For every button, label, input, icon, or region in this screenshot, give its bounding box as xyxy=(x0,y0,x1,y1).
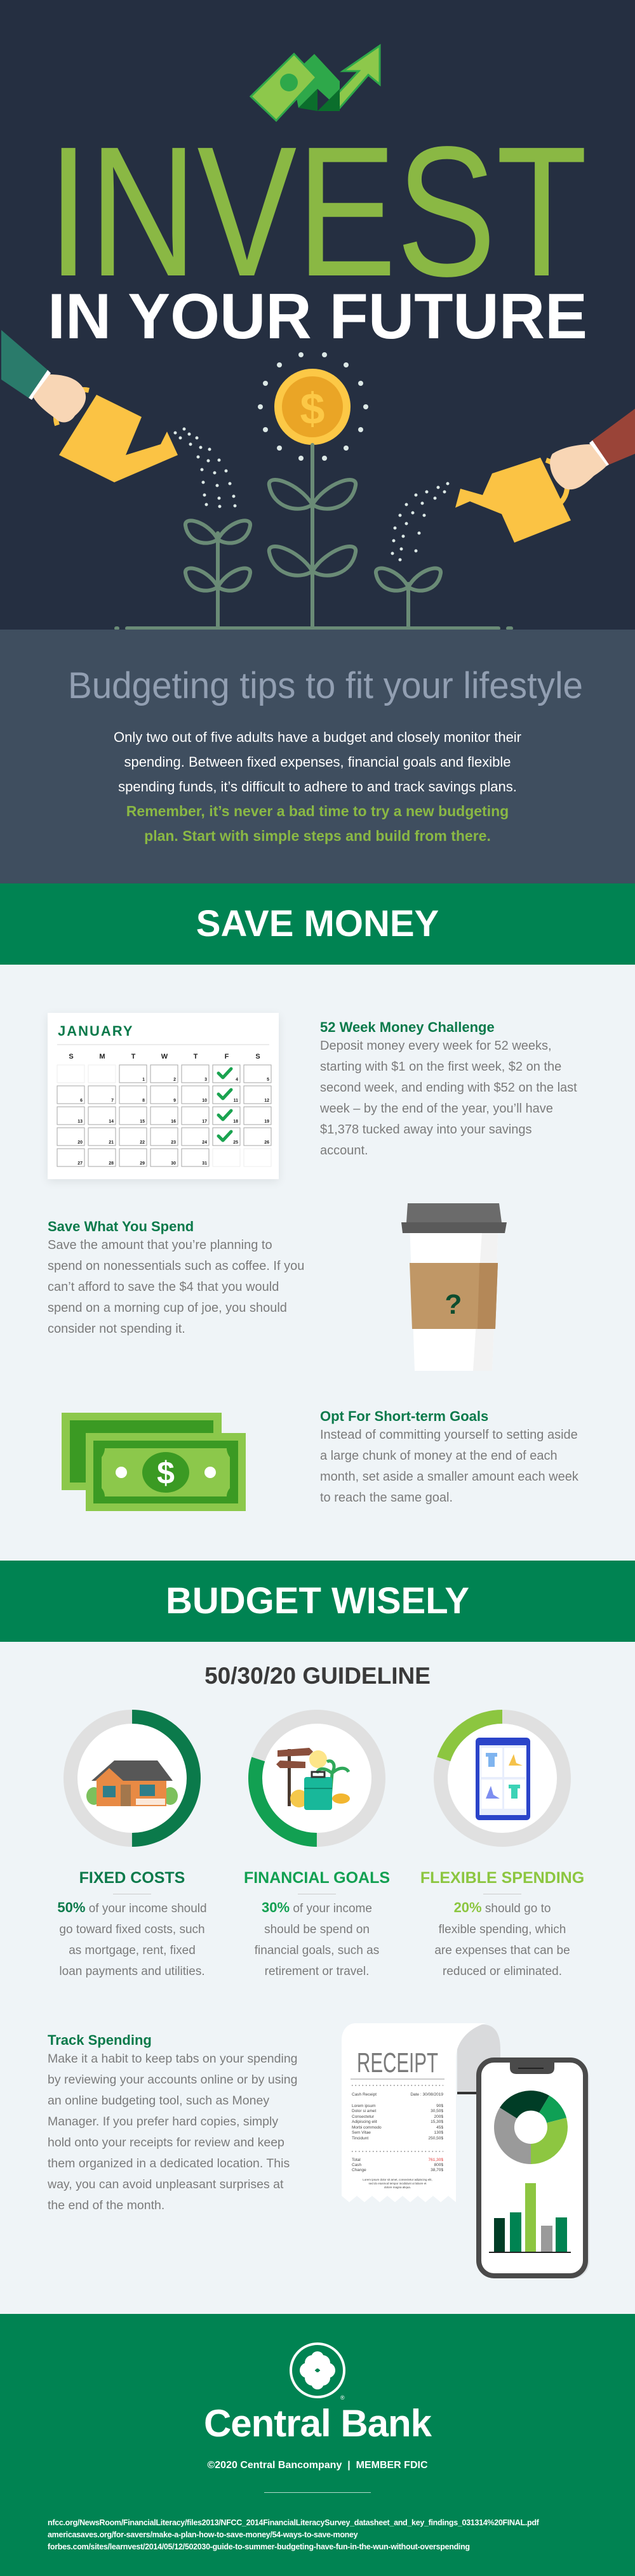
calendar: 11 xyxy=(234,1099,238,1103)
logo: clover in circle: ® xyxy=(340,2394,345,2401)
banner: BUDGET WISELY xyxy=(0,1561,635,1642)
intro paragraph: spending funds, it’s difficult to adhere to and track savings plans. xyxy=(118,779,517,795)
icon: travel suitcase xyxy=(276,1748,350,1810)
donut: flexible spending 20% xyxy=(434,1710,571,1847)
text: track spending xyxy=(48,2032,298,2212)
banner: SAVE MONEY xyxy=(0,883,635,965)
icon: receipt: Cash xyxy=(352,2163,362,2167)
icon: phone with charts xyxy=(476,2057,589,2278)
calendar: 29 xyxy=(140,1161,145,1166)
icon: receipt: Lorem ipsum xyxy=(352,2104,376,2108)
text: track spending: Track Spending xyxy=(48,2032,152,2048)
text: save what you spend: Save the amount that you’re planning to xyxy=(48,1238,272,1252)
calendar: F xyxy=(225,1053,229,1060)
calendar: S xyxy=(69,1053,74,1060)
text: 52 week money challenge: starting with $1 on the first week, $2 on the xyxy=(320,1060,561,1074)
icon: coffee cup xyxy=(401,1203,507,1371)
banner: BUDGET WISELY: BUDGET WISELY xyxy=(166,1580,469,1622)
icon: receipt: 15,30$ xyxy=(431,2120,443,2124)
label: fixed costs xyxy=(57,1869,207,1978)
calendar: 28 xyxy=(109,1161,114,1166)
heading: budgeting tips: Budgeting tips to fit your lifestyle xyxy=(68,665,583,706)
banner: SAVE MONEY: SAVE MONEY xyxy=(196,903,439,944)
icon: coin with sparkle dots xyxy=(258,352,368,461)
label: financial goals xyxy=(244,1869,390,1978)
intro paragraph: Remember, it’s never a bad time to try a new budgeting xyxy=(126,803,509,819)
footer xyxy=(0,2314,635,2576)
text: track spending: an online budgeting tool, such as Money xyxy=(48,2094,269,2108)
hero xyxy=(0,0,635,630)
icon: receipt: 800$ xyxy=(434,2163,443,2167)
calendar: 16 xyxy=(171,1120,176,1124)
text: track spending: way, you can avoid unpleasant surprises at xyxy=(48,2177,283,2191)
intro paragraph: spending. Between fixed expenses, financial goals and flexible xyxy=(124,754,511,770)
brand name: Central Bank xyxy=(204,2402,431,2445)
calendar: 10 xyxy=(202,1099,207,1103)
icon: receipt: 130$ xyxy=(434,2130,443,2135)
text: 52 week money challenge: 52 Week Money Challenge xyxy=(320,1019,495,1035)
text: save what you spend: Save What You Spend xyxy=(48,1219,194,1234)
calendar: 2 xyxy=(173,1078,176,1082)
calendar: 20 xyxy=(77,1140,83,1145)
text: save what you spend: spend on nonessentials such as coffee. If you xyxy=(48,1259,304,1273)
icon: coin with sparkle dots: $ xyxy=(300,384,324,433)
intro paragraph: plan. Start with simple steps and build from there. xyxy=(144,828,491,844)
text: track spending: them organized in a dedicated location. This xyxy=(48,2157,290,2170)
label: flexible spending: reduced or eliminated. xyxy=(443,1965,562,1978)
label: flexible spending: FLEXIBLE SPENDING xyxy=(420,1869,584,1887)
label: fixed costs: as mortgage, rent, fixed xyxy=(69,1944,196,1957)
label: flexible spending xyxy=(420,1869,584,1978)
icon: receipt: 761,30$ xyxy=(428,2158,443,2162)
calendar: M xyxy=(99,1053,105,1060)
text: track spending: Make it a habit to keep tabs on your spending xyxy=(48,2052,298,2066)
icon: money with arrow xyxy=(251,46,380,121)
calendar: 15 xyxy=(140,1120,145,1124)
icon: left hand with watering can xyxy=(1,330,178,482)
calendar: 19 xyxy=(264,1120,269,1124)
plants xyxy=(116,445,511,628)
label: financial goals: 30% of your income xyxy=(262,1899,372,1915)
calendar: 7 xyxy=(111,1099,114,1103)
calendar: JANUARY xyxy=(58,1023,134,1039)
calendar: T xyxy=(194,1053,198,1060)
icon: receipt: Dolor si amet xyxy=(352,2109,376,2113)
text: opt for short-term goals: Opt For Short-term Goals xyxy=(320,1408,488,1424)
calendar: 24 xyxy=(202,1140,207,1145)
donut: fixed costs 50% xyxy=(64,1710,201,1847)
intro paragraph: Only two out of five adults have a budget and closely monitor their xyxy=(114,729,521,745)
icon: receipt: Total xyxy=(352,2158,361,2162)
icon: receipt: Tincidunt xyxy=(352,2136,368,2141)
text: save what you spend: can’t afford to save the $4 that you would xyxy=(48,1280,279,1294)
calendar: 4 xyxy=(236,1078,238,1082)
icon: receipt xyxy=(342,2023,500,2202)
donut: financial goals 30% xyxy=(248,1710,385,1847)
calendar: 18 xyxy=(233,1120,238,1124)
subtitle: IN YOUR FUTURE: IN YOUR FUTURE xyxy=(48,281,587,352)
calendar: 30 xyxy=(171,1161,176,1166)
icon: receipt: Consectetur xyxy=(352,2115,375,2119)
icon: dollar bills: $ xyxy=(157,1455,175,1491)
icon: receipt: Adipiscing elit xyxy=(352,2120,377,2124)
icon: receipt: Morbi commodo xyxy=(352,2125,382,2130)
icon: shopping phone xyxy=(476,1738,530,1820)
calendar: S xyxy=(255,1053,260,1060)
water drops xyxy=(174,428,450,561)
sources xyxy=(48,2518,539,2551)
label: flexible spending: flexible spending, which xyxy=(439,1923,566,1936)
calendar xyxy=(48,1013,279,1179)
icon: receipt: 250,50$ xyxy=(428,2136,443,2141)
sources: forbes.com/sites/learnvest/2014/05/12/502030-guide-to-summer-budgeting-have-fun-in-the-wun-without-overspending xyxy=(48,2542,470,2551)
sources: nfcc.org/NewsRoom/FinancialLiteracy/files2013/NFCC_2014FinancialLiteracySurvey_datasheet_and_key_findings_031314%20FINAL.pdf xyxy=(48,2518,539,2527)
calendar: 3 xyxy=(204,1078,207,1082)
calendar: W xyxy=(161,1053,168,1060)
text: 52 week money challenge: account. xyxy=(320,1144,368,1158)
label: fixed costs: FIXED COSTS xyxy=(79,1869,185,1887)
intro panel xyxy=(0,630,635,883)
calendar: 31 xyxy=(202,1161,207,1166)
calendar: T xyxy=(131,1053,136,1060)
text: track spending: the end of the month. xyxy=(48,2198,164,2212)
logo: clover in circle xyxy=(290,2342,345,2401)
text: 52 week money challenge: second week, and ending with $52 on the last xyxy=(320,1081,577,1095)
icon: house xyxy=(86,1760,178,1806)
chart: bars xyxy=(489,2183,571,2252)
icon: coffee cup: ? xyxy=(445,1289,462,1320)
text: opt for short-term goals xyxy=(320,1408,578,1505)
calendar: 26 xyxy=(264,1140,269,1145)
copyright line: ©2020 Central Bancompany | MEMBER FDIC xyxy=(207,2460,428,2471)
label: financial goals: should be spend on xyxy=(264,1923,370,1936)
text: save what you spend: consider not spending it. xyxy=(48,1322,185,1336)
text: 52 week money challenge: $1,378 tucked away into your savings xyxy=(320,1123,532,1137)
label: flexible spending: 20% should go to xyxy=(454,1899,551,1915)
label: fixed costs: 50% of your income should xyxy=(57,1899,207,1915)
text: opt for short-term goals: a large chunk of money at the end of each xyxy=(320,1449,558,1463)
label: financial goals: retirement or travel. xyxy=(265,1965,369,1978)
calendar: 6 xyxy=(80,1099,83,1103)
icon: receipt: dolore magna aliqua. xyxy=(384,2186,411,2189)
label: flexible spending: are expenses that can be xyxy=(434,1944,570,1957)
calendar: 22 xyxy=(140,1140,145,1145)
icon: receipt: Sem Vitae xyxy=(352,2130,371,2135)
text: opt for short-term goals: to reach the same goal. xyxy=(320,1491,453,1505)
calendar: 25 xyxy=(233,1140,238,1145)
text: 52 week money challenge: Deposit money every week for 52 weeks, xyxy=(320,1039,552,1053)
icon: receipt: 90$ xyxy=(436,2104,443,2108)
calendar: 8 xyxy=(142,1099,145,1103)
icon: right hand with watering can xyxy=(455,409,635,543)
label: financial goals: financial goals, such as xyxy=(255,1944,379,1957)
calendar: 12 xyxy=(264,1099,269,1103)
icon: receipt: 200$ xyxy=(434,2115,443,2119)
calendar: 27 xyxy=(77,1161,83,1166)
text: opt for short-term goals: month, set aside a smaller amount each week xyxy=(320,1470,578,1484)
label: fixed costs: loan payments and utilities. xyxy=(59,1965,205,1978)
calendar: 23 xyxy=(171,1140,176,1145)
text: track spending: by reviewing your accounts online or by using xyxy=(48,2073,297,2087)
calendar: 1 xyxy=(142,1078,145,1082)
label: financial goals: FINANCIAL GOALS xyxy=(244,1869,390,1887)
icon: receipt: Date : 30/08/2019 xyxy=(410,2092,443,2097)
icon: receipt: 45$ xyxy=(436,2125,443,2130)
icon: dollar bills xyxy=(62,1413,246,1511)
chart: donut xyxy=(494,2091,568,2164)
calendar: 17 xyxy=(202,1120,207,1124)
heading: 50/30/20 guideline: 50/30/20 GUIDELINE xyxy=(204,1663,431,1689)
text: track spending: hold onto your receipts for review and keep xyxy=(48,2136,284,2150)
icon: receipt: 30,50$ xyxy=(431,2109,443,2113)
calendar: 21 xyxy=(109,1140,114,1145)
icon: receipt: Lorem ipsum dolor sit amet, consectetur adipiscing elit, xyxy=(363,2178,432,2181)
icon: receipt: RECEIPT xyxy=(357,2047,438,2078)
text: save what you spend: spend on a morning cup of joe, you should xyxy=(48,1301,287,1315)
calendar: 14 xyxy=(109,1120,114,1124)
sources: americasaves.org/for-savers/make-a-plan-how-to-save-money/54-ways-to-save-money xyxy=(48,2530,358,2539)
text: 52 week money challenge xyxy=(320,1019,577,1158)
intro paragraph xyxy=(114,729,521,844)
icon: receipt: 38,70$ xyxy=(431,2168,443,2172)
icon: receipt: sed do eiusmod tempor incididunt ut labore et xyxy=(368,2182,427,2185)
text: track spending: Manager. If you prefer hard copies, simply xyxy=(48,2115,278,2129)
icon: receipt: Cash Receipt xyxy=(352,2092,377,2097)
label: fixed costs: go toward fixed costs, such xyxy=(59,1923,205,1936)
icon: receipt: Change xyxy=(352,2168,366,2172)
text: opt for short-term goals: Instead of committing yourself to setting aside xyxy=(320,1428,578,1442)
text: save what you spend xyxy=(48,1219,304,1336)
calendar: 9 xyxy=(173,1099,176,1103)
text: 52 week money challenge: week – by the end of the year, you’ll have xyxy=(320,1102,553,1116)
calendar: 13 xyxy=(77,1120,83,1124)
calendar: 5 xyxy=(267,1078,269,1082)
